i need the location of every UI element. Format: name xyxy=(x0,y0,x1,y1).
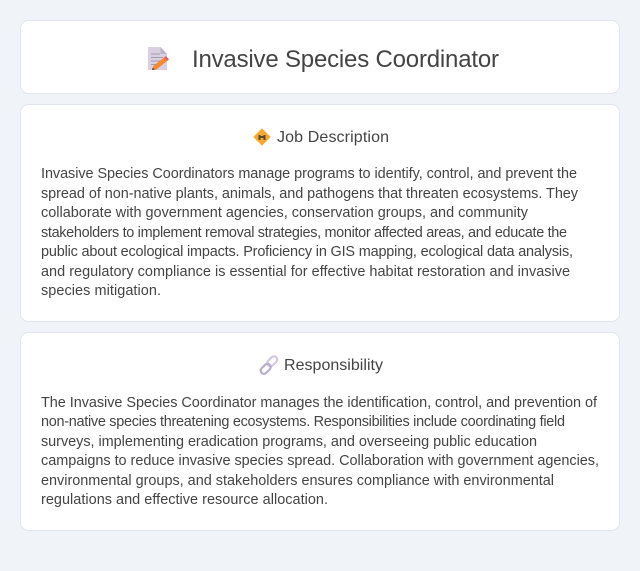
text block: responsibility xyxy=(41,395,599,508)
heading: responsibility: Responsibility xyxy=(284,357,383,374)
text block: responsibility: campaigns to reduce invasive species spread. Collaboration with government agencies, xyxy=(41,453,599,469)
text block: responsibility: environmental groups, and stakeholders ensures compliance with environmental xyxy=(41,473,554,489)
icon: diamond sign xyxy=(254,129,270,145)
text block: job description: species mitigation. xyxy=(41,283,161,299)
text block: job description: spread of non-native plants, animals, and pathogens that threaten ecosystems. They xyxy=(41,186,579,202)
text block: job description: public about ecological impacts. Proficiency in GIS mapping, ecological data analysis, xyxy=(41,244,573,260)
text block: job description: stakeholders to implement removal strategies, monitor affected areas, and educate the xyxy=(41,225,567,241)
text block: job description: Invasive Species Coordinators manage programs to identify, control, and prevent the xyxy=(41,166,577,182)
text block: responsibility: regulations and effective resource allocation. xyxy=(41,492,328,508)
icon: chain link xyxy=(259,355,279,375)
text block: responsibility: The Invasive Species Coordinator manages the identification, control, and prevention of xyxy=(41,395,598,411)
heading: job description: Job Description xyxy=(277,129,389,146)
icon: document with pencil xyxy=(148,47,169,70)
panel: job description xyxy=(20,104,620,322)
title: Invasive Species Coordinator xyxy=(192,46,499,73)
text block: responsibility: non-native species threatening ecosystems. Responsibilities include coordinating field xyxy=(41,414,565,430)
text block: responsibility: surveys, implementing eradication programs, and overseeing public education xyxy=(41,434,537,450)
panel: title card xyxy=(20,20,620,94)
text block: job description: and regulatory compliance is essential for effective habitat restoration and invasive xyxy=(41,264,570,280)
panel: responsibility xyxy=(20,332,620,530)
text block: job description: collaborate with government agencies, conservation groups, and community xyxy=(41,205,529,221)
text block: job description xyxy=(41,166,579,299)
